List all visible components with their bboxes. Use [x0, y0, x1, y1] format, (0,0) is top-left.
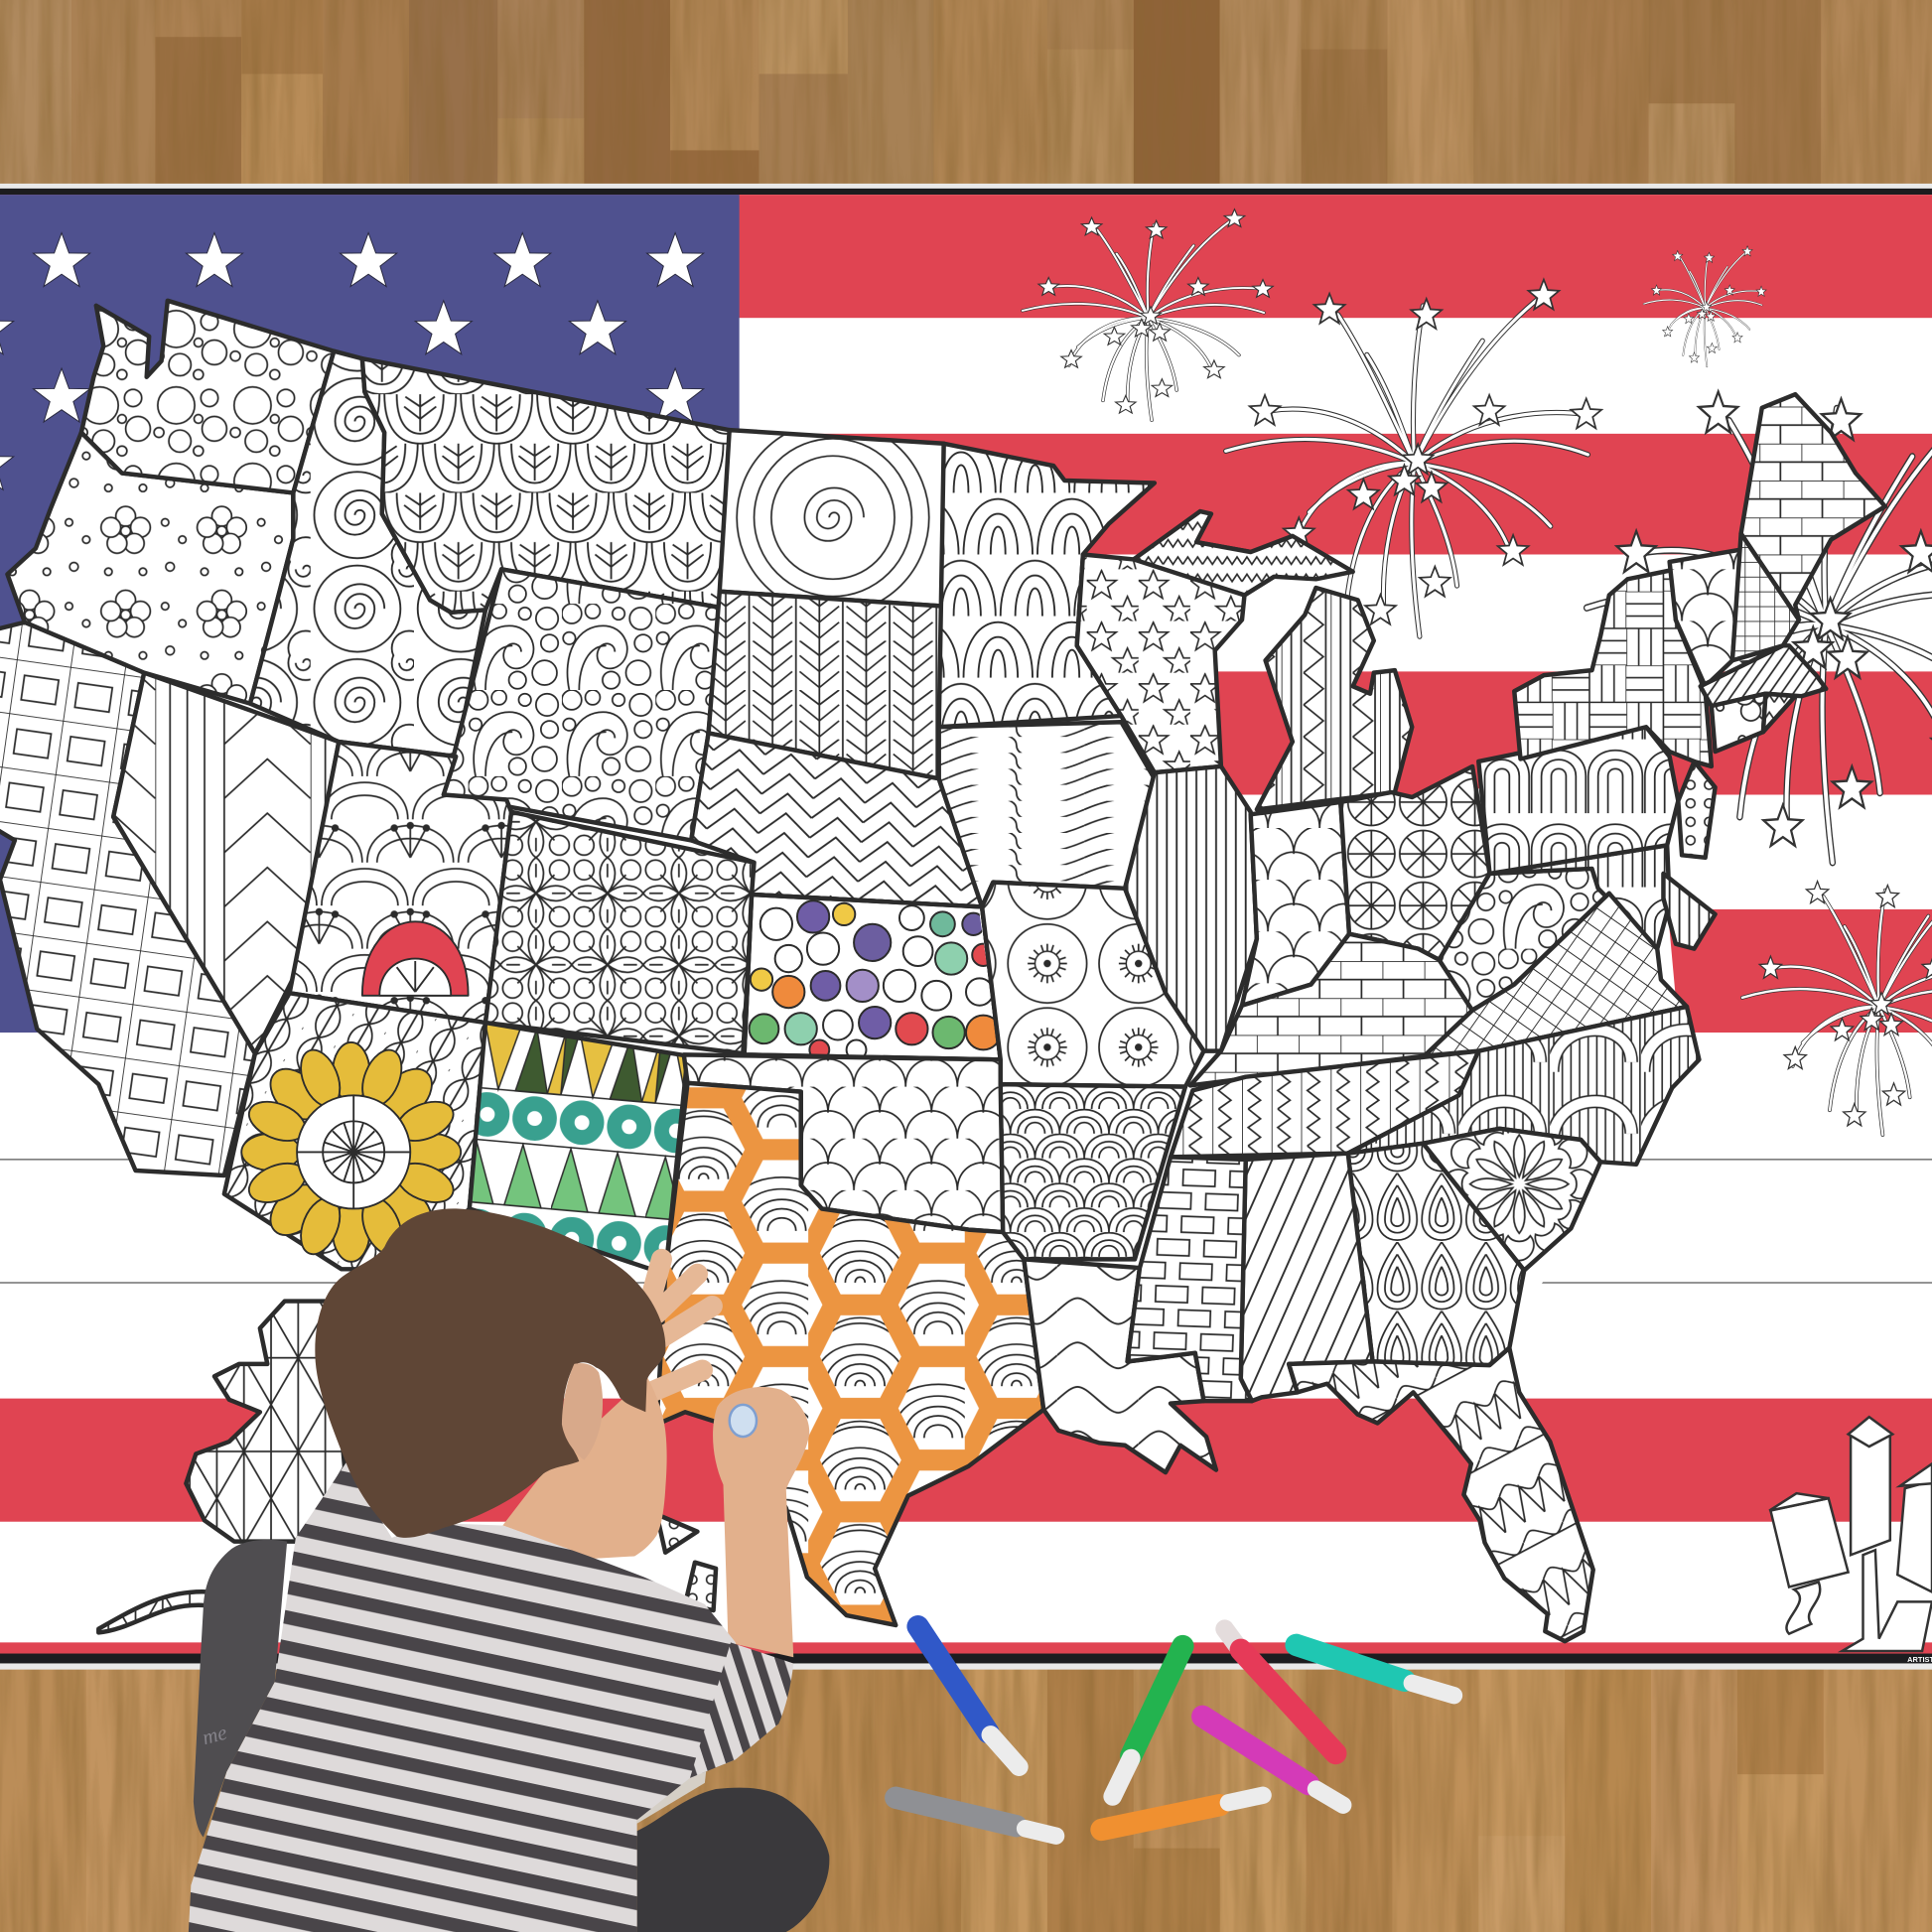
striped shirt: [189, 1462, 736, 1932]
state: New Mexico: [470, 1023, 688, 1274]
striped sleeve: [690, 1642, 793, 1778]
state: Oklahoma: [684, 1054, 1003, 1232]
state: Kentucky: [1190, 934, 1472, 1085]
state: Pennsylvania: [1478, 727, 1678, 874]
state: Arizona: [224, 993, 485, 1269]
state: Hawaii: [656, 1514, 716, 1610]
red stripes: [0, 195, 1932, 1654]
state: Idaho: [250, 351, 485, 757]
fireworks: [1023, 209, 1932, 1135]
state: Connecticut: [1712, 694, 1765, 752]
state: Indiana: [1242, 802, 1349, 1006]
firework: small top right: [1644, 246, 1766, 366]
poster flag background: [0, 184, 1932, 1670]
state: South Carolina: [1423, 1129, 1600, 1271]
state: Wisconsin: [1077, 542, 1274, 772]
state: Rhode Island: [1763, 694, 1795, 732]
state: New Hampshire: [1732, 533, 1799, 660]
state: Utah: [290, 742, 511, 1023]
state: Illinois: [1125, 766, 1257, 1051]
state: Wyoming: [444, 569, 720, 840]
state: Nevada: [113, 673, 339, 1053]
firework: large centre: [1226, 280, 1601, 636]
left hand fingers: [648, 1259, 712, 1392]
state: Mississippi: [1128, 1157, 1252, 1401]
marker: orange: [1102, 1795, 1263, 1830]
canton stars: [0, 233, 704, 489]
state: West Virginia: [1440, 869, 1609, 1011]
marker: red: [1225, 1629, 1335, 1753]
state: Alabama: [1241, 1154, 1373, 1401]
marker: green: [1113, 1646, 1182, 1796]
child colouring the poster: [189, 1208, 829, 1932]
state: Georgia: [1348, 1144, 1524, 1365]
top floor planks: [0, 0, 1932, 185]
state: Upper Michigan: [1134, 511, 1353, 595]
state: Ohio: [1340, 766, 1489, 960]
state: Tennessee: [1171, 1051, 1478, 1157]
forearm and hand holding marker: [713, 1387, 809, 1657]
state: Maryland: [1489, 845, 1670, 949]
state: Texas: [656, 1083, 1043, 1625]
state: Montana: [362, 358, 730, 613]
pale undershirt: [637, 1749, 709, 1824]
marker: blue: [918, 1626, 1019, 1767]
raised knee in grey sock: me: [200, 1721, 229, 1749]
brown hair: [315, 1208, 665, 1538]
state: Virginia: [1425, 894, 1687, 1056]
state: Louisiana: [1024, 1259, 1216, 1472]
state: New York: [1514, 569, 1712, 766]
state: Oregon: [7, 433, 293, 704]
state: Arkansas: [1001, 1084, 1185, 1259]
red semicircle flower in Utah: [362, 921, 469, 996]
firework: right edge: [1587, 372, 1932, 863]
face: [502, 1376, 667, 1559]
firework: lower right: [1742, 871, 1932, 1135]
state: North Carolina: [1348, 1007, 1699, 1165]
map base fill: [25, 431, 1676, 1405]
icon: yellow sunflower: [241, 1042, 461, 1262]
state: Nebraska: [691, 733, 982, 906]
state: Maine: [1741, 394, 1885, 620]
marker: magenta: [1202, 1717, 1343, 1805]
dark trousers: [637, 1788, 829, 1932]
ear: [562, 1363, 603, 1460]
state: New Jersey: [1678, 761, 1716, 858]
state: Missouri: [982, 883, 1204, 1087]
state: Massachusetts: [1701, 645, 1826, 706]
marker pens: [896, 1626, 1453, 1836]
state: North Dakota: [720, 430, 944, 607]
state: California: [0, 622, 255, 1175]
state: Delaware: [1663, 874, 1716, 949]
multicoloured pebbles: [750, 900, 1001, 1059]
state: Colorado: [485, 812, 755, 1053]
raised knee in grey sock: [194, 1540, 287, 1837]
map of the United States: [0, 301, 1885, 1641]
state: Florida: [1289, 1348, 1593, 1641]
state: Michigan: [1257, 588, 1412, 809]
blue canton: [0, 195, 740, 1033]
state: Alaska: [98, 1302, 345, 1632]
state: South Dakota: [709, 592, 944, 778]
firecrackers: [1769, 1417, 1932, 1651]
state: Iowa: [939, 722, 1155, 906]
firework: top centre: [1023, 209, 1273, 420]
state: Washington: [81, 301, 334, 492]
state: Vermont: [1670, 550, 1741, 686]
state: Minnesota: [939, 444, 1155, 727]
marker: grey: [896, 1798, 1056, 1836]
marker: teal: [1297, 1645, 1453, 1696]
bottom floor planks: [0, 1666, 1932, 1932]
state: Kansas: [745, 895, 1001, 1059]
